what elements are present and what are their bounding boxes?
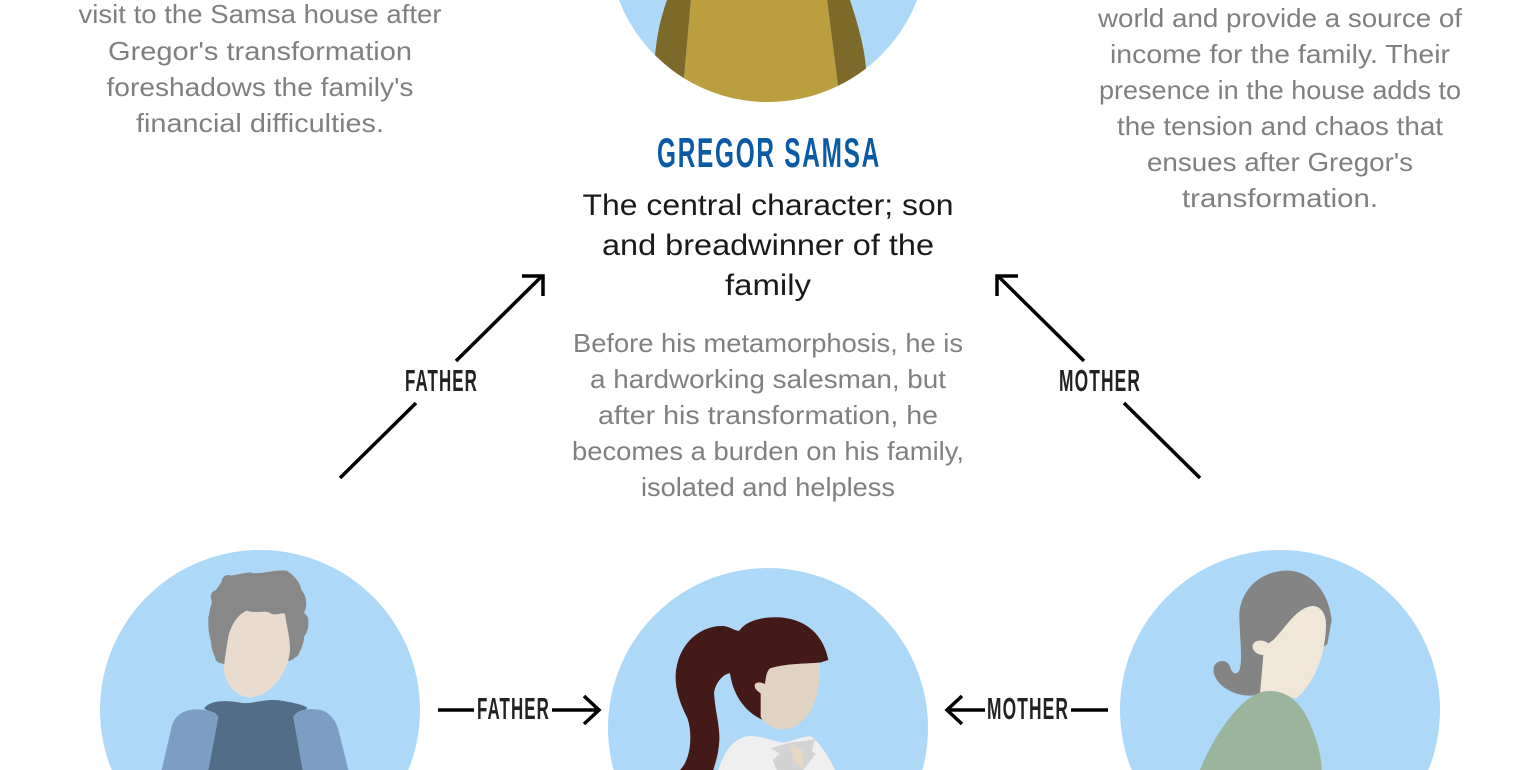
label: mother horizontal: MOTHER [987, 691, 1069, 726]
text block: Gregor role [582, 189, 954, 302]
text block: right character description: the tension and chaos that [1117, 111, 1444, 141]
text block: Gregor description [572, 328, 964, 502]
text block: left character description: foreshadows the family's [106, 72, 414, 102]
icon: mother portrait [1120, 550, 1440, 770]
label: father horizontal: FATHER [477, 691, 550, 726]
text block: Gregor role: family [725, 269, 811, 302]
text block: right character description: income for the family. Their [1110, 39, 1450, 69]
arrow: mother to sister [947, 691, 1108, 726]
icon: Gregor Samsa portrait [619, 0, 917, 102]
text block: right character description: world and provide a source of [1097, 3, 1463, 33]
text block: Gregor description: a hardworking salesman, but [590, 364, 947, 394]
arrow: mother to Gregor [997, 276, 1200, 478]
text block: right character description: transformation. [1182, 183, 1378, 213]
icon: father portrait [100, 550, 420, 770]
icon: sister portrait [608, 568, 928, 770]
text block: Gregor description: becomes a burden on his family, [572, 436, 964, 466]
text block: Gregor description: Before his metamorphosis, he is [573, 328, 963, 358]
arrow: father to sister [438, 691, 599, 726]
text block: Gregor role: The central character; son [582, 189, 954, 222]
label: mother diagonal: MOTHER [1059, 363, 1141, 398]
text block: left character description: financial difficulties. [136, 108, 384, 138]
text block: right character description [1097, 3, 1463, 213]
text block: left character description [78, 0, 442, 138]
text block: Gregor description: after his transformation, he [598, 400, 938, 430]
text block: left character description: Gregor's transformation [108, 36, 412, 66]
label: father diagonal: FATHER [405, 363, 478, 398]
text block: Gregor role: and breadwinner of the [602, 229, 934, 262]
heading: Gregor Samsa: GREGOR SAMSA [657, 129, 881, 176]
arrow: father to Gregor [340, 276, 543, 478]
text block: right character description: ensues after Gregor's [1147, 147, 1413, 177]
text block: Gregor description: isolated and helpless [641, 472, 895, 502]
text block: right character description: presence in the house adds to [1099, 75, 1461, 105]
